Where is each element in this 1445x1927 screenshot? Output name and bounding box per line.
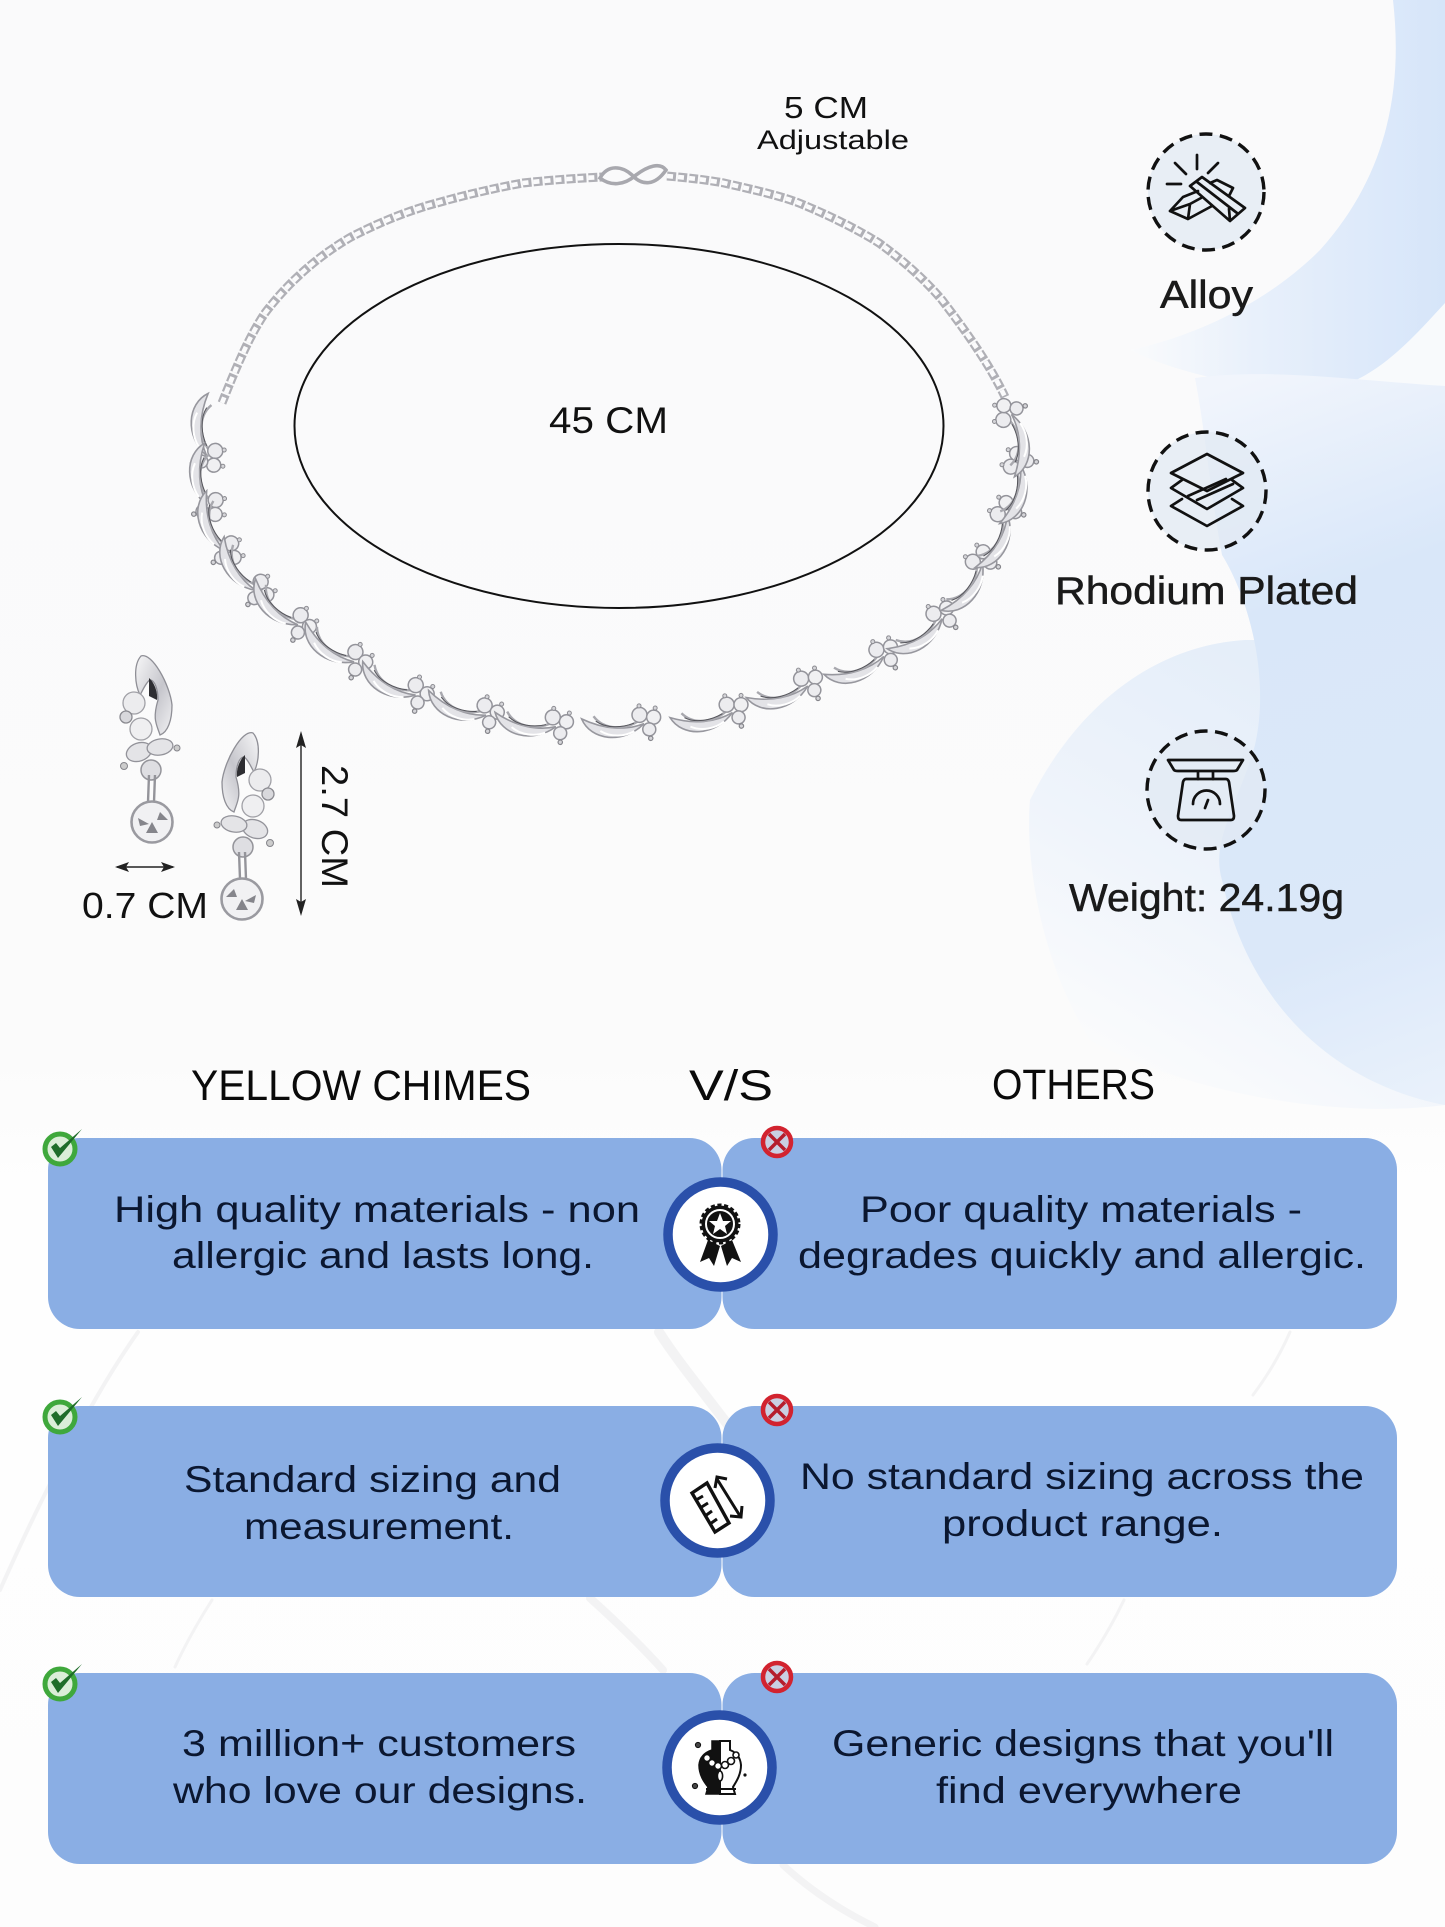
panel: others sizing: No standard sizing across the bbox=[800, 1456, 1364, 1497]
label: weight: Weight: 24.19g bbox=[1069, 877, 1344, 920]
panel: yellow chimes quality: High quality materials - non bbox=[114, 1189, 640, 1230]
label: 0.7 CM: 0.7 CM bbox=[82, 885, 208, 926]
necklace links bbox=[180, 392, 1041, 746]
feature: weight bbox=[1069, 731, 1344, 920]
panel: others quality bbox=[722, 1138, 1397, 1329]
label: rhodium plated: Rhodium Plated bbox=[1055, 570, 1358, 613]
comparison row 3 bbox=[45, 1663, 1397, 1864]
comparison row 1 bbox=[45, 1128, 1397, 1329]
icon: check bbox=[45, 1397, 82, 1432]
ellipse: 45 cm length bbox=[294, 244, 944, 608]
earring left bbox=[120, 656, 180, 842]
necklace chain bbox=[222, 176, 1005, 403]
earring right bbox=[214, 733, 274, 920]
icon: layers bbox=[1148, 432, 1266, 550]
feature: alloy bbox=[1148, 134, 1264, 317]
label: 5 CM adjustable: 5 CM bbox=[784, 90, 868, 125]
icon: check bbox=[45, 1129, 82, 1164]
icon: necklace bust bbox=[667, 1715, 772, 1820]
heading: yellow chimes: YELLOW CHIMES bbox=[191, 1062, 531, 1110]
heading: others: OTHERS bbox=[992, 1061, 1155, 1109]
clasp bbox=[600, 166, 666, 184]
panel: yellow chimes quality bbox=[48, 1138, 722, 1329]
panel: yellow chimes quality: allergic and lasts long. bbox=[172, 1235, 594, 1276]
heading: v/s: V/S bbox=[689, 1062, 773, 1110]
earrings bbox=[120, 656, 274, 920]
icon: rosette badge bbox=[668, 1182, 773, 1287]
panel: others designs: Generic designs that you'll bbox=[832, 1723, 1334, 1764]
label: 2.7 CM: 2.7 CM bbox=[314, 765, 355, 888]
arrow: earring height bbox=[296, 731, 306, 916]
icon: gold bars bbox=[1148, 134, 1264, 250]
panel: yellow chimes sizing: Standard sizing and bbox=[184, 1459, 561, 1500]
panel: others designs bbox=[722, 1673, 1397, 1864]
panel: others quality: Poor quality materials - bbox=[860, 1189, 1302, 1230]
panel: yellow chimes customers: 3 million+ customers bbox=[182, 1723, 576, 1764]
panel: others sizing bbox=[722, 1406, 1397, 1597]
icon: cross bbox=[763, 1396, 791, 1424]
label: 5 CM adjustable: Adjustable bbox=[757, 125, 909, 155]
label: alloy: Alloy bbox=[1160, 274, 1254, 317]
icon: cross bbox=[763, 1663, 791, 1691]
panel: others quality: degrades quickly and allergic. bbox=[798, 1235, 1366, 1276]
arrow: earring width bbox=[115, 862, 175, 872]
panel: yellow chimes customers: who love our designs. bbox=[172, 1770, 587, 1811]
comparison row 2 bbox=[45, 1396, 1397, 1597]
feature: rhodium plated bbox=[1055, 432, 1358, 613]
panel: yellow chimes sizing: measurement. bbox=[244, 1506, 514, 1547]
panel: others designs: find everywhere bbox=[936, 1770, 1242, 1811]
necklace bbox=[180, 166, 1041, 746]
panel: others sizing: product range. bbox=[942, 1503, 1223, 1544]
icon: check bbox=[45, 1664, 82, 1699]
panel: yellow chimes customers bbox=[48, 1673, 722, 1864]
label: 45 CM: 45 CM bbox=[549, 400, 668, 441]
icon: kitchen scale bbox=[1147, 731, 1265, 849]
icon: cross bbox=[763, 1128, 791, 1156]
label: 5 CM adjustable bbox=[757, 90, 909, 155]
icon: ruler and arrow bbox=[665, 1448, 770, 1553]
panel: yellow chimes sizing bbox=[48, 1406, 722, 1597]
